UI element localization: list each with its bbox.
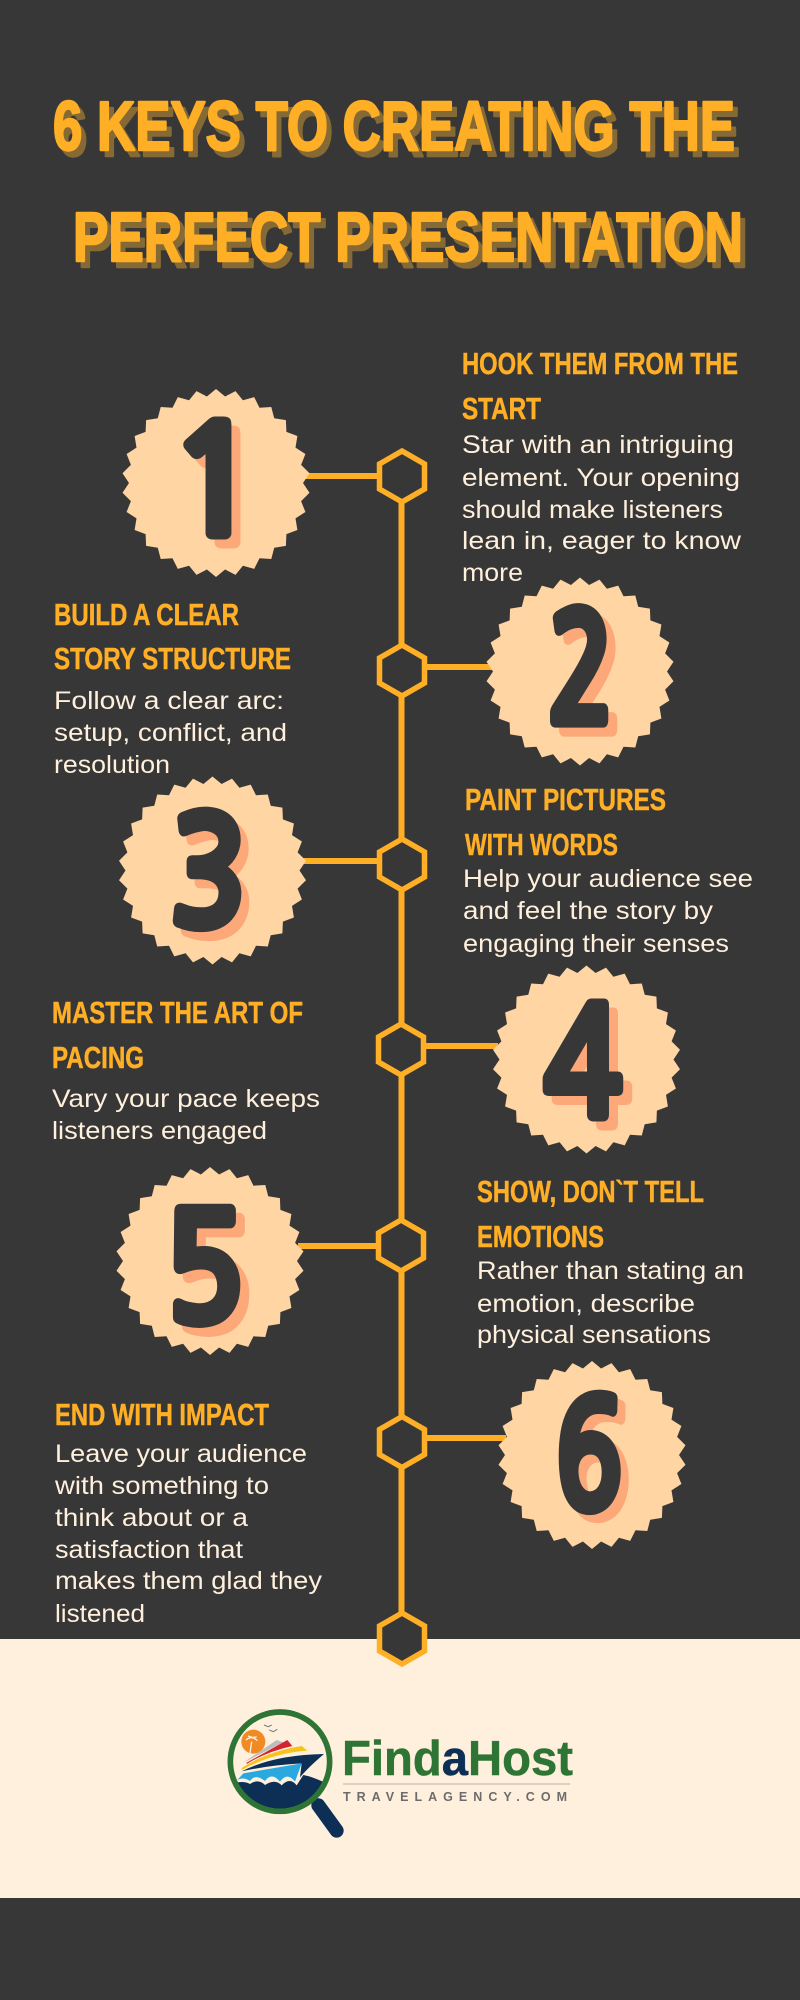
step 3 text: and feel the story by [463, 897, 714, 925]
divider [343, 1783, 570, 1785]
badge 6: 6 [563, 1392, 631, 1540]
step 4 text [52, 995, 320, 1145]
step 5 text: SHOW, DON`T TELL [477, 1174, 704, 1209]
step 2 text [54, 597, 291, 779]
connector 6 [425, 1435, 506, 1441]
hexagon node 6 [380, 1416, 424, 1468]
hexagon node 5 [378, 1220, 424, 1271]
step 6 text: END WITH IMPACT [55, 1397, 269, 1432]
badge 6 [498, 1361, 686, 1549]
connector 2 [425, 664, 492, 670]
step 1 text [462, 346, 742, 587]
step 6 text: think about or a [55, 1504, 248, 1532]
step 1 text: START [462, 391, 541, 426]
step 6 text: Leave your audience [55, 1440, 307, 1468]
connector 1 [305, 473, 380, 479]
step 1 text: element. Your opening [462, 464, 740, 492]
badge 5: 5 [164, 1197, 245, 1345]
badge 1 [122, 389, 310, 577]
icon: magnifier with ship [230, 1712, 337, 1831]
badge 1: 1 [168, 410, 262, 558]
connector 5 [298, 1243, 380, 1249]
step 3 text: WITH WORDS [465, 827, 618, 862]
step 4 text: Vary your pace keeps [52, 1085, 320, 1113]
timeline spine [398, 476, 404, 1638]
step 4 text: MASTER THE ART OF [52, 995, 303, 1030]
step 1 text: lean in, eager to know [462, 527, 742, 555]
step 3 text [463, 782, 753, 958]
footer band [0, 1639, 800, 1898]
hexagon node 7 [380, 1613, 424, 1664]
step 5 text: emotion, describe [477, 1290, 695, 1318]
step 5 text: Rather than stating an [477, 1257, 744, 1285]
step 2 text: setup, conflict, and [54, 719, 287, 747]
step 6 text: with something to [54, 1472, 269, 1500]
brand domain: TRAVELAGENCY.COM [343, 1790, 567, 1804]
step 6 text [54, 1397, 323, 1628]
hexagon node 2 [380, 645, 424, 696]
hexagon node 1 [380, 451, 424, 502]
step 6 text: listened [55, 1600, 145, 1628]
step 6 text: satisfaction that [55, 1536, 243, 1564]
badge 2: 2 [547, 598, 615, 746]
logo [230, 1712, 573, 1831]
badge 4: 4 [543, 992, 623, 1140]
badge 2 [486, 578, 674, 766]
badge 3: 3 [177, 810, 256, 958]
badge 3: 3 [169, 801, 248, 949]
badge 5: 5 [173, 1206, 254, 1354]
step 5 text: EMOTIONS [477, 1219, 604, 1254]
connector 4 [424, 1043, 498, 1049]
step 2 text: resolution [54, 751, 170, 779]
badge 2: 2 [556, 606, 624, 754]
title [53, 87, 748, 282]
step 4 text: listeners engaged [52, 1117, 267, 1145]
badge 3 [119, 776, 306, 964]
badge 6: 6 [555, 1384, 623, 1532]
badge 4: 4 [552, 1000, 632, 1148]
step 5 text [477, 1174, 744, 1349]
badge 4 [493, 966, 680, 1154]
step 1 text: should make listeners [462, 496, 723, 524]
step 5 text: physical sensations [477, 1321, 711, 1349]
badge 5 [116, 1167, 304, 1355]
step 2 text: Follow a clear arc: [54, 687, 284, 715]
hexagon node 4 [378, 1024, 424, 1075]
step 2 text: STORY STRUCTURE [54, 641, 291, 676]
connector 3 [300, 858, 380, 864]
step 3 text: engaging their senses [463, 930, 729, 958]
step 4 text: PACING [52, 1040, 144, 1075]
step 1 text: more [462, 559, 523, 587]
step 3 text: Help your audience see [463, 865, 753, 893]
step 1 text: Star with an intriguing [462, 431, 734, 459]
step 3 text: PAINT PICTURES [465, 782, 666, 817]
step 6 text: makes them glad they [55, 1567, 323, 1595]
brand name: FindaHost [342, 1732, 573, 1786]
hexagon node 3 [380, 839, 424, 890]
badge 1: 1 [177, 418, 271, 566]
step 2 text: BUILD A CLEAR [54, 597, 239, 632]
